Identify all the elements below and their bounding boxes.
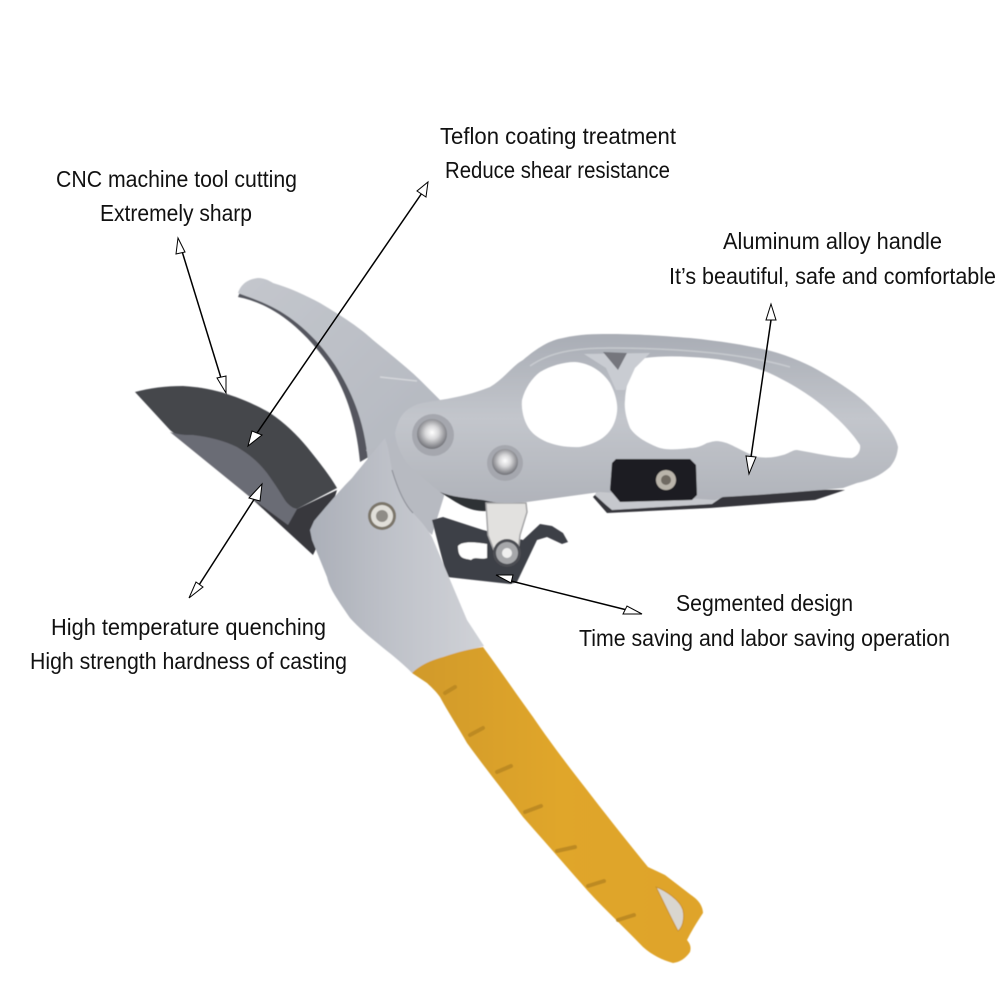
lower silver handle [310, 438, 484, 673]
metal link [486, 503, 527, 553]
callout: High temperature quenching: High temperature quenching [51, 614, 326, 640]
grip ridges [445, 687, 634, 920]
aluminium handle with two finger holes [395, 334, 898, 503]
jaw crease [380, 377, 417, 381]
link screw [493, 539, 521, 567]
hook blade [432, 517, 568, 584]
blade bevel [170, 432, 297, 525]
hook blade notch holes [458, 542, 487, 560]
grip hanging hole [656, 887, 684, 931]
pivot screw [368, 502, 396, 530]
upper curved jaw [238, 278, 442, 470]
arrow: Teflon coating [248, 182, 428, 446]
rivet large [412, 414, 454, 456]
callout: Segmented design: Segmented design [676, 590, 853, 616]
handle seam [392, 470, 413, 513]
callout: CNC machine tool cutting: CNC machine tool cutting [56, 166, 297, 192]
callout: Segmented design [579, 590, 950, 651]
slider button [610, 459, 697, 502]
dark band under plate [440, 485, 530, 511]
arrow: segmented design [496, 575, 642, 614]
callout: High temperature quenching [30, 614, 347, 674]
callout: Aluminum alloy handle [669, 228, 996, 289]
pruning shears photo illustration [135, 278, 898, 963]
arrow: aluminium handle [746, 304, 776, 474]
callout: Aluminum alloy handle: Aluminum alloy handle [723, 228, 942, 254]
callout: CNC machine tool cutting: Extremely sharp [100, 200, 252, 226]
jaw lower extension behind handle [366, 440, 445, 535]
lower blade shank [250, 490, 337, 555]
arrow: quenching [189, 484, 262, 598]
callout: Segmented design: Time saving and labor saving operation [579, 625, 950, 651]
callout: CNC machine tool cutting [56, 166, 297, 226]
arrow: CNC blade edge [176, 238, 226, 393]
callout: Teflon coating treatment [440, 123, 677, 183]
upper curved jaw dark underside [238, 292, 372, 462]
handle top rim highlight [530, 348, 790, 367]
blade [135, 386, 337, 509]
Y brace highlight [584, 353, 650, 390]
brace dark triangle [603, 352, 627, 370]
rivet small [487, 445, 523, 481]
slider screw [656, 470, 676, 490]
slider frame [595, 455, 725, 510]
lower dark edge of handle [593, 488, 845, 513]
callout: Teflon coating treatment: Reduce shear resistance [445, 157, 670, 183]
callout: Teflon coating treatment: Teflon coating treatment [440, 123, 677, 149]
yellow grip [412, 647, 703, 963]
callout: High temperature quenching: High strength hardness of casting [30, 648, 347, 674]
